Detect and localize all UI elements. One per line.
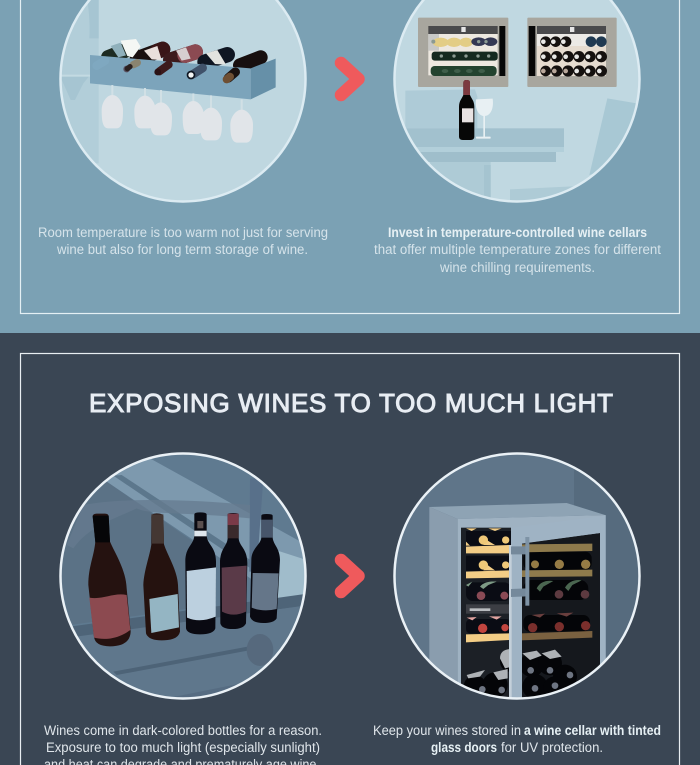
wine bottle bodies bbox=[108, 48, 261, 65]
text: problem description bbox=[38, 225, 328, 257]
text: solution description: wine chilling requirements. bbox=[439, 260, 595, 275]
bottle 2 bbox=[143, 513, 180, 640]
text: problem description: wine but also for long term storage of wine. bbox=[56, 242, 308, 257]
text: light problem description bbox=[44, 723, 322, 765]
text: light solution description: a wine cellar with tinted bbox=[524, 723, 661, 738]
illustration: bottles in sunlight bbox=[59, 452, 307, 700]
text: light solution description: glass doors bbox=[431, 740, 497, 755]
text: light problem description: Wines come in dark-colored bottles for a reason. bbox=[44, 723, 322, 738]
bottle labels bbox=[111, 39, 226, 65]
text: light solution description: for UV protection. bbox=[501, 740, 603, 755]
cabinet bbox=[429, 503, 606, 705]
text: solution description bbox=[374, 225, 661, 275]
open door and handle bbox=[509, 516, 606, 705]
shelves and bottles bbox=[464, 528, 592, 700]
shelf box bbox=[90, 55, 276, 99]
text: light solution description: Keep your wines stored in bbox=[373, 723, 521, 738]
text: solution description: Invest in temperature-controlled wine cellars bbox=[388, 225, 647, 240]
chair and table bbox=[393, 89, 640, 203]
text: problem description: Room temperature is too warm not just for serving bbox=[38, 225, 328, 240]
illustration: wine cellar with tinted glass door bbox=[393, 452, 641, 700]
panel: too much light section bbox=[0, 333, 700, 765]
panel: room temperature section bbox=[0, 0, 700, 333]
text: solution description: that offer multiple temperature zones for different bbox=[374, 242, 661, 257]
heading: EXPOSING WINES TO TOO MUCH LIGHT bbox=[89, 388, 613, 418]
arrow: top chevron bbox=[341, 63, 358, 95]
illustration: wine rack with hanging glasses bbox=[59, 0, 307, 203]
text: light solution description bbox=[373, 723, 661, 755]
right wine cellar bbox=[527, 18, 617, 87]
left wine cellar bbox=[418, 18, 508, 87]
illustration: built-in wine cellars above table bbox=[390, 0, 650, 210]
bottle 3 bbox=[185, 512, 216, 634]
bottle 4 bbox=[220, 513, 247, 629]
bottle 5 bbox=[250, 514, 280, 623]
bottle necks over shelf bbox=[97, 61, 235, 79]
arrow: bottom chevron bbox=[341, 560, 358, 592]
wine bottle bbox=[459, 80, 474, 140]
hanging wine glasses bbox=[102, 85, 253, 143]
light beams and shelf bbox=[62, 459, 304, 697]
bottle 1 bbox=[88, 514, 131, 646]
text: light problem description: Exposure to too much light (especially sunlight) bbox=[46, 740, 320, 755]
wine glass bbox=[476, 99, 493, 139]
